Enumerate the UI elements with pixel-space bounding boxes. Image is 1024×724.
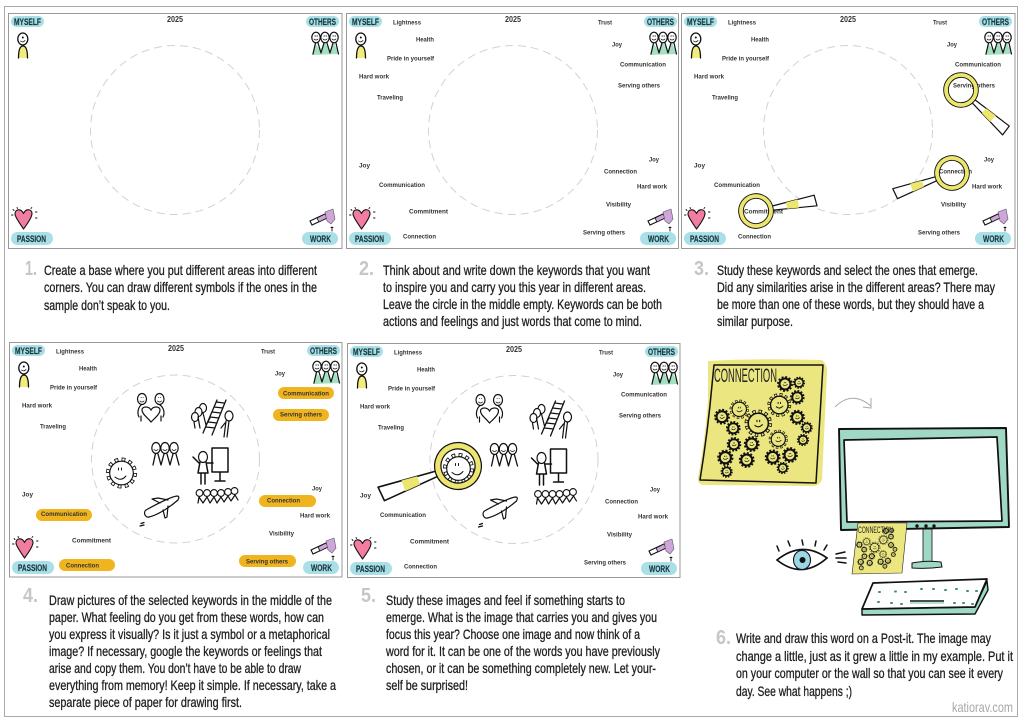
text block: step 2: to inspire you and carry you this year in different areas.	[383, 279, 646, 295]
panel: step 5 choose one image: Joy	[650, 486, 660, 494]
panel: step 5 choose one image: Communication	[621, 392, 667, 398]
text block: step 5: 5.	[361, 585, 376, 607]
panel: step 4 drawings: Joy	[275, 370, 285, 378]
illustration: large post-it with gears: CONNECTION	[714, 366, 777, 387]
panel: step 2 keywords: MYSELF	[352, 17, 379, 28]
panel: step 5 choose one image: Communication	[380, 512, 426, 519]
panel: step 4 drawings: Pride in yourself	[50, 384, 98, 392]
panel: step 5 choose one image: Hard work	[360, 404, 390, 410]
panel: step 2 keywords: Trust	[598, 20, 613, 26]
panel: step 2 keywords: WORK	[648, 234, 669, 245]
panel: step 2 keywords: Connection	[403, 234, 436, 240]
text block: step 1: sample don’t speak to you.	[44, 297, 170, 313]
panel: step 3 magnifiers: Serving others	[918, 230, 960, 236]
panel: step 2 keywords: Lightness	[393, 20, 421, 26]
panel: step 2 keywords: Connection	[604, 168, 637, 176]
illustration: large post-it with gears	[698, 359, 827, 486]
panel: step 5 choose one image: OTHERS	[648, 347, 675, 358]
panel: step 4 drawings: 2025	[168, 344, 184, 353]
panel: step 4 drawings: Traveling	[40, 424, 66, 430]
panel: step 2 keywords: Communication	[379, 182, 425, 189]
panel: step 5 choose one image: MYSELF	[353, 347, 380, 358]
panel: step 1 base sheet: PASSION	[17, 234, 46, 245]
panel: step 5 choose one image: PASSION	[356, 564, 385, 575]
panel: step 1 base sheet: 2025	[167, 15, 183, 24]
panel: step 5 choose one image: Traveling	[378, 424, 404, 432]
illustration: small post-it on the monitor: CONNECTION	[858, 525, 893, 535]
text block: step 1: Create a base where you put different areas into different	[44, 262, 317, 278]
text block: step 6: day. See what happens ;)	[736, 683, 852, 699]
panel: step 2 keywords: Hard work	[359, 74, 389, 80]
panel: step 4 drawings	[10, 342, 342, 577]
panel: step 3 magnifiers: 2025	[840, 15, 856, 24]
panel: step 1 base sheet	[8, 14, 342, 248]
text block: step 3	[694, 258, 995, 329]
text block: step 4	[23, 585, 336, 710]
panel: step 4 drawings: Lightness	[56, 348, 84, 356]
panel: step 3 magnifiers: Connection	[738, 234, 771, 240]
text block: step 1: corners. You can draw different symbols if the ones in the	[44, 279, 317, 295]
panel: step 3 magnifiers: OTHERS	[982, 17, 1009, 28]
panel: step 1 base sheet: WORK	[310, 234, 331, 245]
arrow	[835, 398, 871, 408]
panel: step 3 magnifiers: Communication	[955, 62, 1001, 68]
text block: step 5: Study these images and feel if something starts to	[386, 592, 625, 608]
text block: step 3: 3.	[694, 258, 709, 280]
panel: step 4 drawings: Serving others	[280, 412, 322, 418]
text block: step 4: paper. What feeling do you get from these words, how can	[49, 609, 324, 625]
text block: step 2: 2.	[359, 258, 374, 280]
panel: step 3 magnifiers: Joy	[947, 42, 957, 48]
panel: step 2 keywords	[346, 14, 678, 248]
panel: step 5 choose one image: WORK	[649, 564, 670, 575]
panel: step 2 keywords: Health	[416, 36, 434, 44]
panel: step 2 keywords: Traveling	[377, 94, 403, 102]
illustration: monitor	[839, 428, 1009, 568]
panel: step 5 choose one image: Joy	[613, 372, 623, 378]
panel: step 2 keywords: PASSION	[355, 234, 384, 245]
panel: step 3 magnifiers: Joy	[984, 156, 994, 164]
text block: step 5: chosen, or it can be something completely new. Let your-	[386, 660, 656, 676]
panel: step 5 choose one image: Pride in yourself	[388, 386, 436, 392]
panel: step 4 drawings: Joy	[312, 486, 322, 492]
illustration: small post-it on the monitor	[852, 523, 907, 574]
panel: step 2 keywords: Joy	[359, 162, 370, 170]
panel: step 5 choose one image: Commitment	[410, 538, 450, 546]
panel: step 3 magnifiers: Connection	[939, 168, 972, 176]
panel: step 3 magnifiers: Communication	[714, 182, 760, 189]
icon: eye	[777, 540, 846, 570]
text block: step 4: 4.	[23, 585, 38, 607]
panel: step 2 keywords: Serving others	[583, 230, 625, 236]
text block: step 2: Leave the circle in the middle empty. Keywords can be both	[383, 296, 662, 312]
panel: step 4 drawings: Connection	[66, 562, 99, 570]
panel: step 4 drawings: Visibility	[269, 530, 294, 538]
panel: step 4 drawings: Hard work	[300, 512, 330, 520]
panel: step 2 keywords: 2025	[505, 15, 521, 24]
panel: step 3 magnifiers: Pride in yourself	[722, 56, 770, 62]
panel: step 5 choose one image: Connection	[404, 564, 437, 570]
panel: step 3 magnifiers: Lightness	[728, 20, 756, 26]
text block: step 4: Draw pictures of the selected keywords in the middle of the	[49, 592, 332, 608]
panel: step 4 drawings: Hard work	[22, 402, 52, 410]
panel: step 2 keywords: Joy	[612, 42, 622, 48]
panel: step 4 drawings: MYSELF	[15, 346, 42, 357]
text block: step 2: actions and feelings and just words that come to mind.	[383, 313, 642, 329]
text block: step 4: image? If necessary, google the keywords or feelings that	[49, 643, 322, 659]
panel: step 3 magnifiers: Visibility	[941, 202, 966, 208]
panel: step 4 drawings: Communication	[41, 511, 87, 518]
panel: step 3 magnifiers: Joy	[694, 162, 705, 170]
panel: step 4 drawings: Trust	[261, 348, 276, 356]
panel: step 5 choose one image: Visibility	[607, 532, 632, 538]
panel: step 3 magnifiers: Commitment	[744, 208, 784, 216]
text block: step 4: arise and copy them. You don’t have to be able to draw	[49, 660, 302, 676]
panel: step 2 keywords: Pride in yourself	[387, 56, 435, 62]
text block: step 2	[359, 258, 662, 329]
panel: step 3 magnifiers	[682, 14, 1016, 248]
panel: step 3 magnifiers: PASSION	[690, 234, 719, 245]
panel: step 2 keywords: Communication	[620, 62, 666, 68]
panel: step 4 drawings: PASSION	[18, 563, 47, 574]
panel: step 2 keywords: Commitment	[409, 208, 449, 216]
text block: step 1: 1.	[25, 258, 37, 280]
text block: step 3: similar purpose.	[717, 313, 793, 329]
panel: step 4 drawings: Joy	[22, 492, 33, 498]
panel: step 5 choose one image: Hard work	[638, 514, 668, 520]
panel: step 4 drawings: WORK	[311, 563, 332, 574]
text block: step 5: emerge. What is the image that carries you and gives you	[386, 609, 657, 625]
text block: step 4: separate piece of paper for drawing first.	[49, 694, 242, 710]
panel: step 4 drawings: Serving others	[246, 558, 288, 566]
panel: step 3 magnifiers: MYSELF	[687, 17, 714, 28]
text block: step 5: word for it. It can be one of the words you have previously	[385, 643, 660, 659]
text block: step 5: self be surprised!	[386, 677, 468, 693]
panel: step 5 choose one image: Joy	[360, 492, 371, 500]
panel: step 3 magnifiers: WORK	[983, 234, 1004, 245]
panel: step 3 magnifiers: Serving others	[953, 82, 995, 90]
panel: step 5 choose one image	[348, 344, 680, 578]
panel: step 2 keywords: Joy	[649, 156, 659, 164]
panel: step 3 magnifiers: Health	[751, 36, 769, 44]
text block: step 6: 6.	[716, 627, 731, 649]
text block: step 6	[716, 627, 1013, 699]
text block: step 1	[25, 258, 317, 313]
panel: step 5 choose one image: Trust	[599, 350, 614, 356]
panel: step 5 choose one image: Health	[417, 366, 435, 374]
panel: step 5 choose one image: Serving others	[584, 560, 626, 566]
panel: step 3 magnifiers: Traveling	[712, 94, 738, 102]
text block: step 2: Think about and write down the keywords that you want	[383, 262, 650, 278]
panel: step 1 base sheet: MYSELF	[14, 17, 41, 28]
panel: step 3 magnifiers: Trust	[933, 20, 948, 26]
panel: step 4 drawings: Commitment	[72, 538, 112, 544]
illustration: keyboard	[862, 579, 988, 615]
panel: step 5 choose one image: Connection	[605, 498, 638, 506]
panel: step 5 choose one image: Serving others	[619, 412, 661, 420]
panel: step 2 keywords: Hard work	[637, 184, 667, 190]
panel: step 5 choose one image: Lightness	[394, 350, 422, 356]
panel: step 2 keywords: OTHERS	[647, 17, 674, 28]
panel: step 1 base sheet: OTHERS	[309, 17, 336, 28]
text block: step 5: focus this year? Choose one image and now think of a	[386, 626, 640, 642]
text block: step 4: everything from memory! Keep it simple. If necessary, take a	[49, 677, 336, 693]
panel: step 4 drawings: Communication	[283, 390, 329, 398]
panel: step 4 drawings: Health	[79, 366, 97, 372]
panel: step 5 choose one image: 2025	[506, 345, 522, 354]
panel: step 2 keywords: Visibility	[606, 202, 631, 208]
panel: step 4 drawings: OTHERS	[310, 346, 337, 357]
panel: step 2 keywords: Serving others	[618, 82, 660, 90]
panel: step 3 magnifiers: Hard work	[694, 74, 724, 80]
panel: step 3 magnifiers: Hard work	[972, 184, 1002, 190]
text block: step 4: you express it visually? Is it just a symbol or a metaphorical	[49, 626, 330, 642]
text block: step 5	[361, 585, 660, 693]
panel: step 4 drawings: Connection	[267, 498, 300, 504]
